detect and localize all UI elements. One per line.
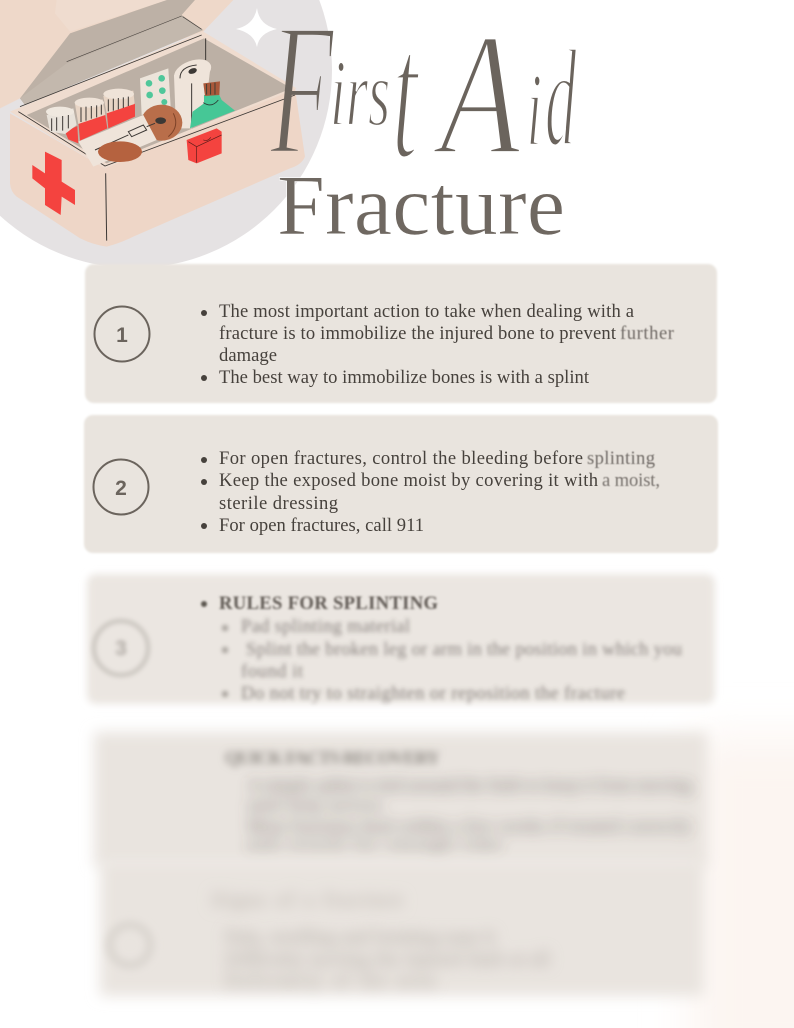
blister pack [140,68,171,115]
splinting rules list: Pad splinting material [241,616,410,637]
number badge 5 [110,925,150,965]
splinting rules list: Splint the broken leg or arm in the position in which you [246,639,682,660]
number badge 1: 1 [116,324,128,347]
panel: step 1 [85,264,717,403]
panel: step 5 [100,860,704,996]
step 4 heading: QUICK FACTS RECOVERY [225,748,441,769]
step 5 heading: Signs of a fracture [212,890,402,911]
panel 5 background [100,860,704,996]
step 2 bullet list: a moist, [602,470,660,491]
number badge 3: 3 [115,637,127,660]
title: Fracture: Fracture [277,157,565,253]
splinting heading: RULES FOR SPLINTING [219,593,438,614]
step 2 bullet list: sterile dressing [219,493,338,514]
number badge 2 [94,460,148,514]
panel: step 4 [94,732,708,866]
splinting rules list: found it [241,661,304,682]
panel: rules for splinting [87,574,715,704]
step 5 blurred list: Deformity of the area [225,970,435,991]
step 4 blurred list: until help arrives [247,795,382,816]
step 4 blurred list: A simple splint is tied around the limb to keep it from moving [247,775,692,796]
peach background wash [690,735,794,1028]
brown pad [98,141,142,162]
kit lid [0,0,233,108]
step 1 bullet list: The most important action to take when dealing with a [219,301,634,322]
step 5 blurred list [225,927,550,991]
syringe card [78,115,157,167]
splinting rules list: Do not try to straighten or reposition the fracture [241,683,625,704]
step 1 bullet list: The best way to immobilize bones is with a splint [219,367,590,388]
step 4 blurred list: Most fractures heal within a few weeks if treated correctly [247,816,693,837]
number badge 3 [94,621,148,675]
bandage roll [171,55,215,128]
step 1 bullet list: fracture is to immobilize the injured bone to prevent [219,323,617,344]
panel 4 background [94,732,708,866]
step 4 blurred list [247,775,693,855]
small red box [187,128,222,163]
step 2 bullet list: Keep the exposed bone moist by covering it with [219,470,599,491]
red cross [32,152,75,215]
green bottle [190,81,235,128]
step 1 bullet list [201,301,675,388]
icon: white sparkle [236,8,277,47]
number badge 2: 2 [115,477,127,500]
step 2 bullet list [201,448,660,536]
splinting rules list [222,616,682,704]
step 4 blurred list: and rested for enough time [247,834,502,855]
panel 1 background [85,264,717,403]
step 5 blurred list: Difficulty moving the injured limb at all [225,949,550,970]
panel 2 background [84,415,718,553]
step 2 bullet list: For open fractures, call 911 [219,515,424,536]
medicine jars [46,89,135,143]
step 1 bullet list: damage [219,345,277,366]
step 5 blurred list: Pain, swelling and bruising near it [225,927,496,948]
step 2 bullet list: For open fractures, control the bleeding before [219,448,583,469]
icon: first aid kit [0,0,305,247]
panel: step 2 [84,415,718,553]
panel 3 background [87,574,715,704]
kit box body [10,32,305,247]
step 1 bullet list: further [620,323,675,344]
grey circle behind first aid kit [0,0,332,268]
number badge 1 [94,306,150,362]
title: First Aid [270,30,576,156]
step 2 bullet list: splinting [587,448,655,469]
brown roll [141,105,182,141]
